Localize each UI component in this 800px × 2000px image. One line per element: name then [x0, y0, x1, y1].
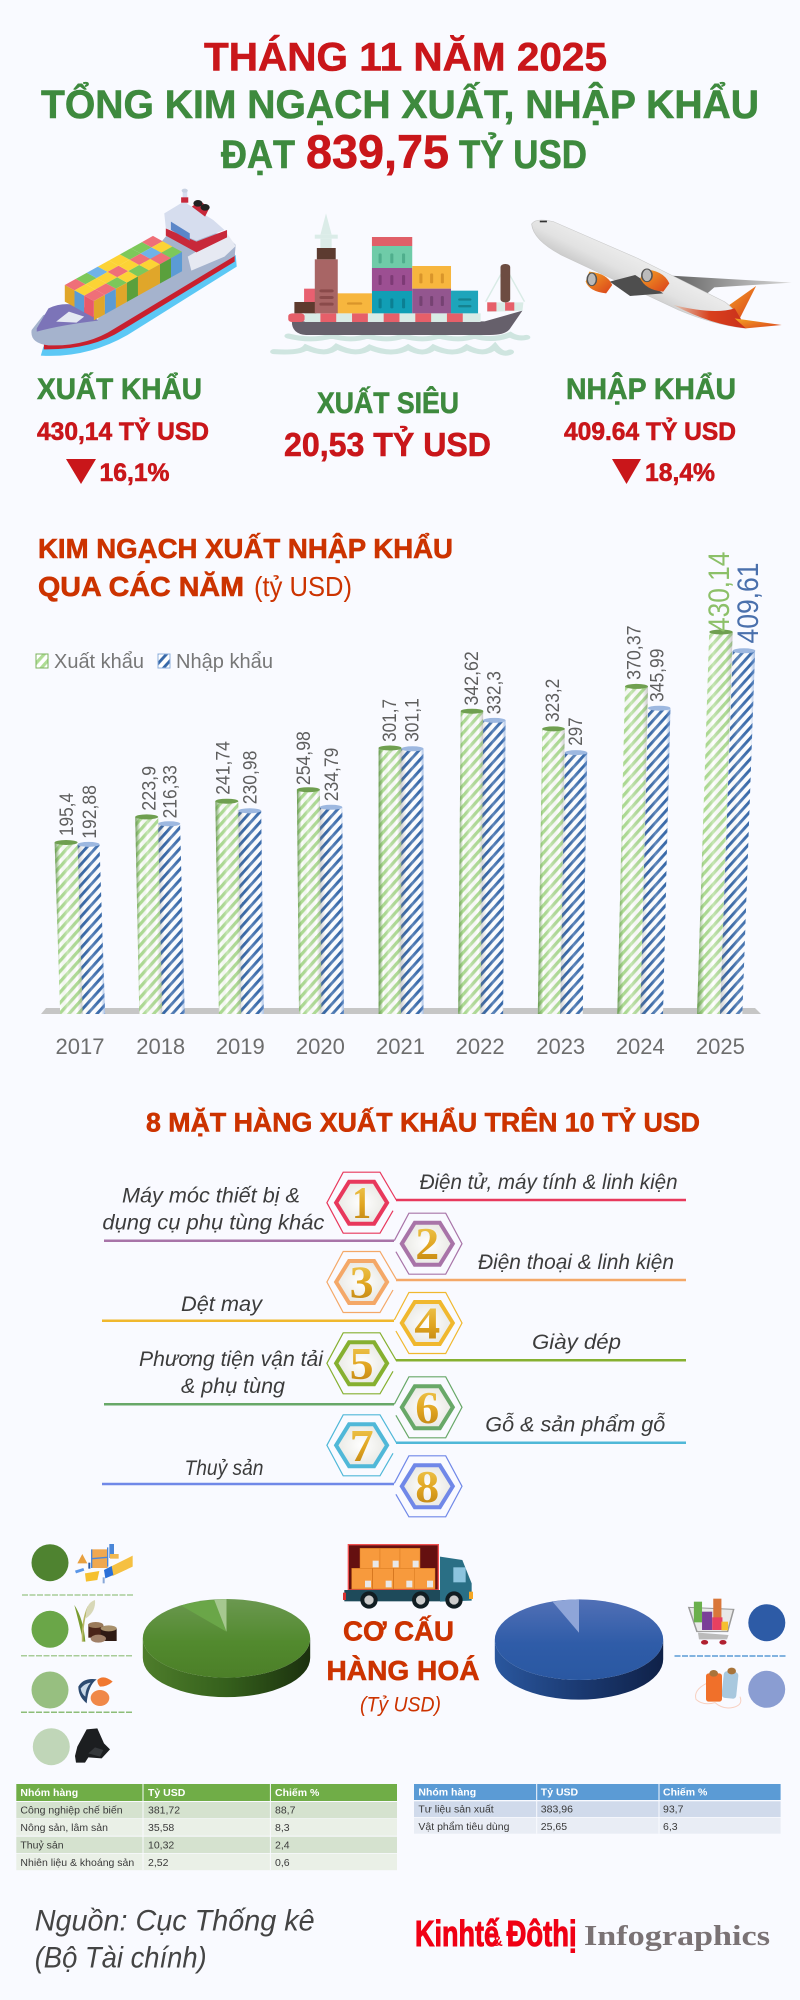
bar value labels: 301,7 [380, 699, 401, 742]
logo: Infographics [584, 1920, 770, 1952]
bars 2020 [297, 787, 344, 1014]
heading: 8 export goods: 8 MẶT HÀNG XUẤT KHẨU TRÊN 10 TỶ USD [146, 1106, 700, 1138]
fuselage [532, 220, 746, 328]
table: import groups: 383,96 [541, 1804, 573, 1816]
engines [640, 269, 669, 292]
legend dot: agriculture and forestry [32, 1611, 68, 1648]
year axis labels: 2025 [696, 1034, 745, 1059]
bar value labels: 345,99 [648, 648, 669, 702]
item 6: & phụ tùng [181, 1375, 285, 1398]
waves [288, 335, 527, 339]
year axis labels: 2018 [136, 1034, 185, 1059]
title line 1: THÁNG 11 NĂM 2025 [204, 34, 607, 80]
icon: shopping cart [689, 1599, 734, 1645]
table: export groups: 2,52 [148, 1857, 169, 1869]
icon: rice and logs [74, 1600, 117, 1643]
item 6 [104, 1348, 462, 1438]
item 7: 7 [350, 1420, 374, 1471]
legend dot: production materials [748, 1604, 785, 1641]
pie chart: exports [143, 1599, 310, 1697]
icon: cargo ship center [274, 213, 527, 353]
item 1: 1 [352, 1177, 371, 1228]
item 6: 6 [415, 1382, 439, 1433]
containers top [65, 236, 182, 301]
item 3: Điện thoại & linh kiện [478, 1251, 674, 1274]
import change: 18,4% [645, 459, 715, 487]
title line 3 [221, 125, 587, 178]
chart floor [41, 1008, 761, 1014]
table: export groups: 381,72 [148, 1804, 180, 1816]
bar value labels: 342,62 [462, 651, 483, 706]
bars 2019 [215, 799, 264, 1014]
item 3 [327, 1251, 686, 1312]
table: export groups: Thuỷ sản [20, 1840, 64, 1852]
item 5: Giày dép [532, 1331, 621, 1354]
bar value labels: 409,61 [732, 562, 765, 644]
item 8: Thuỷ sản [184, 1457, 264, 1480]
bar value labels: 241,74 [214, 741, 234, 795]
icon: down arrow [612, 459, 641, 484]
bar value labels: 430,14 [703, 552, 736, 632]
table: export groups: Nhóm hàng [20, 1787, 78, 1799]
source note [35, 1905, 315, 1974]
item 2 [102, 1184, 462, 1274]
table: export groups [16, 1784, 397, 1870]
logo: Kinhtế [415, 1913, 500, 1954]
title line 3: TỶ USD [459, 131, 587, 177]
bar value labels: 254,98 [294, 731, 315, 785]
table: export groups: 2,4 [275, 1840, 290, 1852]
table: export groups: Nông sản, lâm sản [20, 1822, 108, 1834]
chart heading: QUA CÁC NĂM [38, 571, 244, 602]
table: import groups: Tỷ USD [541, 1786, 579, 1798]
item 6: Phương tiện vận tải [139, 1348, 324, 1371]
table: export groups: 8,3 [275, 1822, 290, 1834]
legend dot: processing industry [32, 1544, 68, 1581]
surplus value: 20,53 TỶ USD [284, 426, 491, 463]
far wing [666, 275, 792, 294]
year axis labels: 2022 [456, 1034, 505, 1059]
item 2: dụng cụ phụ tùng khác [102, 1211, 325, 1234]
item 1 [327, 1171, 686, 1233]
bar value labels: 223,9 [140, 766, 160, 811]
divider [674, 1655, 786, 1657]
item 7: Gỗ & sản phẩm gỗ [485, 1414, 666, 1437]
table: import groups: 93,7 [663, 1804, 684, 1816]
panel: import legend [674, 1599, 786, 1708]
item 8: 8 [415, 1461, 439, 1512]
table: import groups: Vật phẩm tiêu dùng [418, 1821, 510, 1833]
icon: delivery truck [343, 1545, 473, 1609]
superstructure [188, 233, 236, 271]
item 8 [102, 1456, 462, 1517]
surplus label: XUẤT SIÊU [317, 386, 459, 420]
icon: down arrow [66, 459, 96, 484]
title line 3: ĐẠT [221, 133, 295, 177]
bars 2024 [617, 684, 670, 1014]
tail fin [724, 286, 756, 318]
heading: goods structure: (Tỷ USD) [360, 1694, 441, 1717]
bar value labels: 234,79 [322, 748, 343, 801]
export label: XUẤT KHẨU [37, 372, 202, 406]
panel: export legend [21, 1544, 133, 1765]
year axis labels: 2019 [216, 1034, 265, 1059]
bars 2022 [458, 709, 506, 1014]
crane [486, 267, 524, 302]
year axis labels [56, 1034, 745, 1059]
year axis labels: 2024 [616, 1034, 665, 1059]
stat: import [564, 372, 736, 487]
table: export groups: Tỷ USD [148, 1787, 186, 1799]
bars 2018 [135, 814, 185, 1014]
table: export groups: 35,58 [148, 1822, 174, 1834]
source note: (Bộ Tài chính) [35, 1941, 207, 1974]
table: export groups: 10,32 [148, 1840, 174, 1852]
item 2: Máy móc thiết bị & [122, 1184, 300, 1207]
chimney [315, 259, 338, 313]
bar value labels: 195,4 [57, 793, 78, 836]
item 5: 5 [350, 1338, 374, 1389]
containers long side [94, 252, 182, 320]
legend dot: consumer goods [748, 1671, 785, 1708]
panel: ranked export goods [102, 1171, 686, 1517]
title [41, 34, 759, 178]
heading: goods structure [326, 1616, 480, 1717]
bar value labels: 370,37 [625, 626, 646, 680]
chart legend: Xuất khẩu [54, 651, 144, 673]
item 3: 3 [350, 1256, 374, 1308]
icon: warehouse and truck [75, 1544, 133, 1583]
bars 2021 [378, 746, 424, 1014]
title line 3: 839,75 [306, 125, 449, 178]
logo: Đôthị [507, 1913, 577, 1954]
icon: fish and shrimp [78, 1677, 113, 1706]
table: export groups: Nhiên liệu & khoáng sản [20, 1857, 134, 1869]
bar value labels: 230,98 [240, 751, 262, 804]
item 5 [327, 1331, 686, 1394]
bar chart [41, 552, 765, 1059]
containers [372, 237, 412, 246]
table: import groups: Tư liệu sản xuất [418, 1804, 494, 1816]
item 4 [102, 1292, 462, 1354]
chart heading [38, 533, 453, 602]
icon: airplane [532, 220, 792, 328]
containers end [65, 285, 94, 318]
item 2: 2 [415, 1218, 439, 1269]
bar value labels: 323,2 [543, 679, 564, 722]
table: export groups: 0,6 [275, 1857, 290, 1869]
chart legend: Nhập khẩu [176, 651, 273, 673]
table: import groups: Chiếm % [663, 1786, 708, 1798]
table: export groups: Công nghiệp chế biến [20, 1804, 123, 1816]
chart heading: KIM NGẠCH XUẤT NHẬP KHẨU [38, 533, 453, 564]
logo: & [492, 1933, 503, 1950]
item 7 [327, 1414, 686, 1476]
bars 2025 [697, 630, 755, 1014]
dividers [21, 1595, 133, 1712]
near wing [610, 275, 663, 296]
stat: trade surplus [284, 386, 491, 463]
stat: export [37, 372, 209, 487]
icon: container ship export [31, 189, 237, 356]
table: import groups: Nhóm hàng [418, 1786, 476, 1798]
bar value labels: 297 [566, 717, 587, 746]
legend dot: fuel and minerals [33, 1728, 70, 1765]
year axis labels: 2017 [56, 1034, 104, 1059]
table: import groups: 6,3 [663, 1821, 678, 1833]
icon: coal [75, 1728, 110, 1763]
export value: 430,14 TỶ USD [37, 416, 209, 446]
legend dot: seafood [32, 1672, 68, 1708]
year axis labels: 2021 [376, 1034, 425, 1059]
import value: 409.64 TỶ USD [564, 416, 736, 446]
bar value labels: 332,3 [484, 671, 505, 714]
year axis labels: 2020 [296, 1034, 345, 1059]
source note: Nguồn: Cục Thống kê [35, 1905, 315, 1938]
table: import groups [414, 1784, 781, 1834]
title line 2: TỔNG KIM NGẠCH XUẤT, NHẬP KHẨU [41, 80, 759, 127]
bar value labels: 301,1 [402, 698, 424, 742]
tail plane [735, 318, 782, 328]
heading: goods structure: HÀNG HOÁ [326, 1655, 480, 1686]
bar value labels: 216,33 [160, 765, 182, 818]
import label: NHẬP KHẨU [566, 372, 736, 406]
table: export groups: Chiếm % [275, 1787, 320, 1799]
item 1: Điện tử, máy tính & linh kiện [420, 1171, 678, 1194]
bars 2023 [538, 726, 587, 1014]
table: export groups: 88,7 [275, 1804, 296, 1816]
bar value labels [57, 552, 765, 839]
icon: thread spools [696, 1668, 741, 1708]
item 4: 4 [414, 1298, 440, 1348]
year axis labels: 2023 [536, 1034, 585, 1059]
pie chart: imports [495, 1599, 663, 1700]
logo [415, 1913, 770, 1954]
hull [292, 311, 522, 335]
heading: goods structure: CƠ CẤU [343, 1616, 454, 1647]
bars 2017 [55, 840, 105, 1014]
item 4: Dệt may [181, 1293, 264, 1316]
table: import groups: 25,65 [541, 1821, 567, 1833]
chart legend [36, 651, 273, 673]
bar value labels: 192,88 [80, 785, 101, 839]
export change: 16,1% [100, 459, 170, 487]
chart heading: (tỷ USD) [254, 571, 352, 602]
